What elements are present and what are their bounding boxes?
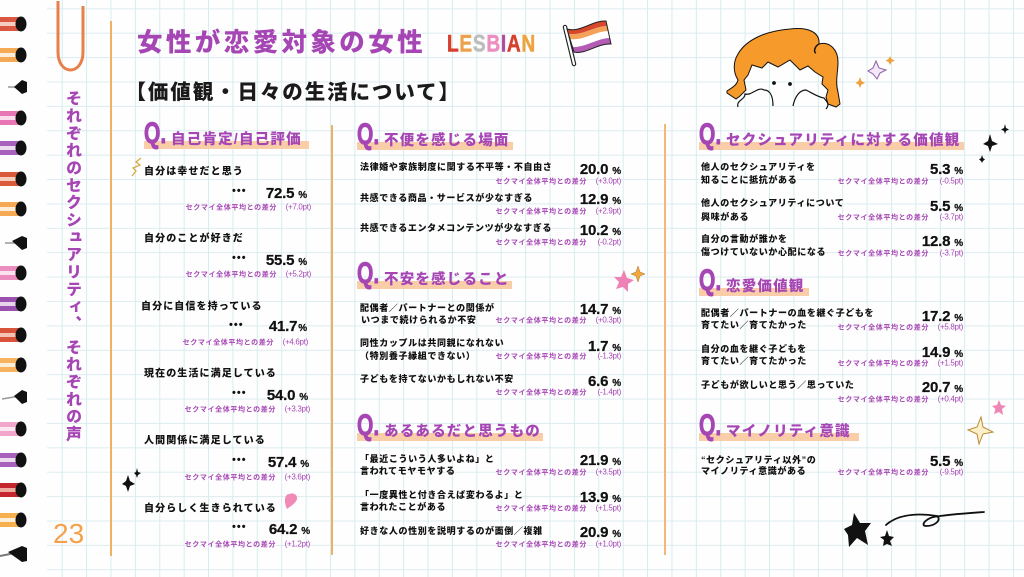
heading: minority awareness: マイノリティ意識	[726, 424, 851, 440]
row: relationships: セクマイ全体平均との差分	[185, 474, 276, 481]
row: entertainment: セクマイ全体平均との差分	[496, 239, 587, 246]
row: happy: 72.5 %	[266, 184, 307, 201]
heading: values about sexuality: Q.	[699, 118, 721, 151]
row: own blood child: 自分の血を継ぐ子どもを	[701, 344, 807, 354]
heading: inconvenient situations: Q.	[357, 118, 379, 151]
heading: values about sexuality: セクシュアリティに対する価値観	[726, 133, 960, 149]
column divider middle	[331, 125, 332, 555]
row: like myself: •••	[232, 252, 247, 264]
row: satisfied with life: •••	[232, 387, 247, 399]
decoration: lilac star with gold sparkles	[856, 56, 895, 88]
row: own blood child: 育てたい／育てたかった	[701, 356, 807, 366]
row: resistance: 5.3 %	[930, 160, 963, 177]
heading: relatable things: あるあるだと思うもの	[384, 424, 541, 440]
row: hurting others: 傷つけていないか心配になる	[701, 247, 826, 257]
panel: middle column	[357, 118, 622, 548]
row: date opposite sex: 言われたことがある	[360, 502, 446, 512]
heading: relatable things: Q.	[357, 409, 379, 442]
row: marriage law: (+3.0pt)	[596, 176, 621, 185]
row: resistance: セクマイ全体平均との差分	[838, 178, 929, 185]
row: partner relationship: 配偶者／パートナーとの関係が	[360, 303, 495, 313]
row: want children: 子どもが欲しいと思う／思っていた	[701, 380, 854, 390]
row: confident: •••	[229, 319, 244, 331]
heading: inconvenient situations: 不便を感じる場面	[384, 133, 510, 149]
row: interest	[700, 197, 963, 222]
decoration: pink star and gold sparkle	[614, 266, 645, 292]
row: be myself: •••	[232, 521, 247, 533]
row: interest: 他人のセクシュアリティについて	[701, 198, 844, 208]
row: confident: 41.7%	[269, 317, 307, 334]
row: entertainment: 共感できるエンタメコンテンツが少なすぎる	[360, 223, 552, 233]
row: marriage law: 法律婚や家族制度に関する不平等・不自由さ	[360, 162, 552, 172]
row: hurting others: 自分の言動が誰かを	[701, 234, 788, 244]
row: hurting others: (-3.7pt)	[940, 248, 963, 257]
row: entertainment: 10.2 %	[580, 221, 621, 238]
row: resistance: 知ることに抵抗がある	[701, 175, 797, 185]
panel: self-esteem column	[141, 117, 311, 548]
row: own blood child: セクマイ全体平均との差分	[838, 360, 929, 367]
decoration: pink star and cream sparkle	[966, 400, 1006, 446]
row: recently many: (+3.5pt)	[596, 467, 621, 476]
row: date opposite sex	[360, 488, 621, 512]
row: partner blood child: (+5.8pt)	[938, 322, 963, 331]
row: partner blood child: 配偶者／パートナーの血を継ぐ子どもを	[701, 308, 874, 318]
row: products: 共感できる商品・サービスが少なすぎる	[360, 193, 533, 203]
row: happy: セクマイ全体平均との差分	[186, 204, 277, 211]
heading: inconvenient situations	[357, 118, 513, 151]
row: co-parent: （特別養子縁組できない）	[360, 351, 475, 361]
heading: anxieties: Q.	[357, 257, 379, 290]
row: partner blood child: セクマイ全体平均との差分	[838, 324, 929, 331]
row: relationships: •••	[232, 454, 247, 466]
heading: relatable things	[357, 409, 543, 442]
row: marriage law: 20.0 %	[580, 160, 621, 177]
row: like myself: (+5.2pt)	[286, 269, 311, 278]
row: satisfied with life	[144, 366, 310, 413]
panel: right column	[699, 118, 964, 404]
row: interest: 5.5 %	[930, 197, 963, 214]
row: partner blood child: 育てたい／育てたかった	[701, 320, 807, 330]
lesbian wordmark: LESBIAN	[447, 30, 536, 57]
row: entertainment	[360, 221, 621, 246]
row: products	[360, 190, 621, 216]
row: want children: (+0.4pt)	[938, 394, 963, 403]
section heading: 【価値観・日々の生活について】	[126, 81, 461, 104]
vertical side caption: それぞれのセクシュアリティ、 それぞれの声	[63, 90, 80, 443]
row: relationships: (+3.6pt)	[285, 472, 310, 481]
row: minority: セクマイ全体平均との差分	[838, 469, 929, 476]
row: like myself	[144, 232, 311, 278]
panel: minority awareness	[690, 410, 970, 482]
row: be myself	[144, 502, 310, 548]
heading: romantic values: 恋愛価値観	[726, 279, 804, 295]
heading: values about sexuality	[699, 118, 964, 151]
icon: pink heart	[284, 493, 298, 509]
row: children: 6.6 %	[588, 372, 621, 389]
heading: minority awareness	[699, 413, 859, 443]
row: resistance: (-0.5pt)	[940, 176, 963, 185]
row: products: (+2.9pt)	[596, 206, 621, 215]
row: satisfied with life: 54.0 %	[267, 386, 308, 403]
decoration: black sparkles left	[122, 468, 141, 492]
row: happy: (+7.0pt)	[286, 202, 311, 211]
heading: self-esteem	[144, 117, 309, 150]
row: date opposite sex: 「一度異性と付き合えば変わるよ」と	[360, 490, 524, 500]
row: happy: 自分は幸せだと思う	[144, 166, 244, 177]
row: want children: セクマイ全体平均との差分	[838, 396, 929, 403]
row: be myself: セクマイ全体平均との差分	[185, 541, 276, 548]
row: be myself: 64.2 %	[269, 520, 310, 537]
row: resistance	[700, 160, 963, 186]
row: marriage law: セクマイ全体平均との差分	[496, 178, 587, 185]
row: like myself: セクマイ全体平均との差分	[186, 271, 277, 278]
row: children: (-1.4pt)	[598, 387, 621, 396]
heading: self-esteem: Q.	[144, 117, 166, 150]
row: happy: •••	[232, 185, 247, 197]
title: 女性が恋愛対象の女性	[137, 29, 426, 57]
row: relationships	[144, 434, 310, 481]
row: minority: (-9.5pt)	[940, 467, 963, 476]
row: explaining gender	[360, 523, 621, 548]
row: interest: (-3.7pt)	[940, 212, 963, 221]
row: be myself: (+1.2pt)	[285, 539, 310, 548]
icon: lesbian flag	[562, 20, 612, 66]
row: partner blood child	[701, 306, 963, 334]
decoration: gold squiggle	[132, 158, 142, 176]
heading: anxieties: 不安を感じること	[384, 272, 510, 288]
row: date opposite sex: 13.9 %	[580, 488, 621, 505]
paper clip	[56, 1, 84, 72]
row: partner relationship: (+0.3pt)	[596, 315, 621, 324]
row: explaining gender: セクマイ全体平均との差分	[496, 541, 587, 548]
column divider left	[110, 21, 112, 556]
row: partner relationship: いつまで続けられるか不安	[361, 315, 476, 325]
row: interest: セクマイ全体平均との差分	[838, 214, 929, 221]
row: date opposite sex: セクマイ全体平均との差分	[496, 505, 587, 512]
heading: romantic values: Q.	[699, 264, 721, 297]
heading: minority awareness: Q.	[699, 409, 721, 442]
row: be myself: 自分らしく生きられている	[144, 503, 277, 514]
row: minority: “セクシュアリティ以外”の	[701, 455, 816, 465]
row: co-parent: 1.7 %	[588, 337, 621, 354]
row: own blood child: 14.9 %	[922, 343, 963, 360]
row: products: セクマイ全体平均との差分	[496, 208, 587, 215]
row: like myself: 55.5 %	[266, 251, 307, 268]
decoration: black stars with swoosh	[844, 511, 985, 547]
row: minority: マイノリティ意識がある	[701, 466, 806, 476]
row: partner relationship: 14.7 %	[580, 300, 621, 317]
row: co-parent: 同性カップルは共同親になれない	[360, 338, 504, 348]
row: satisfied with life: (+3.3pt)	[285, 404, 310, 413]
row: children	[360, 372, 621, 396]
row: hurting others	[700, 232, 963, 258]
row: partner blood child: 17.2 %	[922, 307, 963, 324]
row: want children: 20.7 %	[922, 378, 963, 395]
row: relationships: 人間関係に満足している	[144, 435, 266, 446]
row: co-parent	[360, 337, 622, 361]
row: own blood child	[701, 342, 963, 370]
row: minority: 5.5 %	[930, 452, 963, 469]
row: entertainment: (-0.2pt)	[598, 237, 621, 246]
row: interest: 興味がある	[701, 212, 749, 222]
row: date opposite sex: (+1.5pt)	[596, 503, 621, 512]
heading: self-esteem: 自己肯定/自己評価	[171, 132, 302, 148]
page number: 23	[53, 518, 84, 549]
row: recently many	[360, 451, 622, 476]
row: hurting others: 12.8 %	[922, 232, 963, 249]
row: confident: 自分に自信を持っている	[141, 301, 263, 312]
column divider right	[664, 124, 666, 555]
row: recently many: セクマイ全体平均との差分	[496, 469, 587, 476]
row: recently many: 21.9 %	[580, 451, 621, 468]
row: relationships: 57.4 %	[268, 453, 309, 470]
row: own blood child: (+1.5pt)	[938, 358, 963, 367]
row: products: 12.9 %	[580, 190, 621, 207]
heading: romantic values	[699, 264, 809, 297]
row: partner relationship	[360, 300, 621, 326]
row: resistance: 他人のセクシュアリティを	[701, 162, 816, 172]
row: like myself: 自分のことが好きだ	[144, 233, 244, 244]
row: recently many: 言われてモヤモヤする	[360, 466, 455, 476]
illustration: orange-haired character	[726, 28, 840, 110]
row: children: セクマイ全体平均との差分	[496, 389, 587, 396]
row: hurting others: セクマイ全体平均との差分	[838, 250, 929, 257]
row: minority	[701, 452, 963, 480]
row: confident: (+4.6pt)	[283, 337, 308, 346]
row: co-parent: (-1.3pt)	[598, 351, 621, 360]
spiral binding	[0, 16, 27, 562]
row: explaining gender: 好きな人の性別を説明するのが面倒／複雑	[360, 526, 543, 536]
row: recently many: 「最近こういう人多いよね」と	[360, 454, 495, 464]
row: satisfied with life: セクマイ全体平均との差分	[185, 406, 276, 413]
row: explaining gender: 20.9 %	[580, 523, 621, 540]
row: co-parent: セクマイ全体平均との差分	[496, 353, 587, 360]
decoration: black sparkles top right	[979, 124, 1009, 163]
row: children: 子どもを持てないかもしれない不安	[360, 374, 514, 384]
row: confident	[141, 300, 308, 346]
row: happy	[144, 164, 311, 211]
row: marriage law	[360, 160, 621, 186]
row: confident: セクマイ全体平均との差分	[183, 339, 274, 346]
row: partner relationship: セクマイ全体平均との差分	[496, 317, 587, 324]
heading: anxieties	[357, 257, 512, 290]
row: want children	[701, 378, 963, 406]
row: explaining gender: (+1.0pt)	[596, 539, 621, 548]
row: satisfied with life: 現在の生活に満足している	[144, 368, 277, 379]
